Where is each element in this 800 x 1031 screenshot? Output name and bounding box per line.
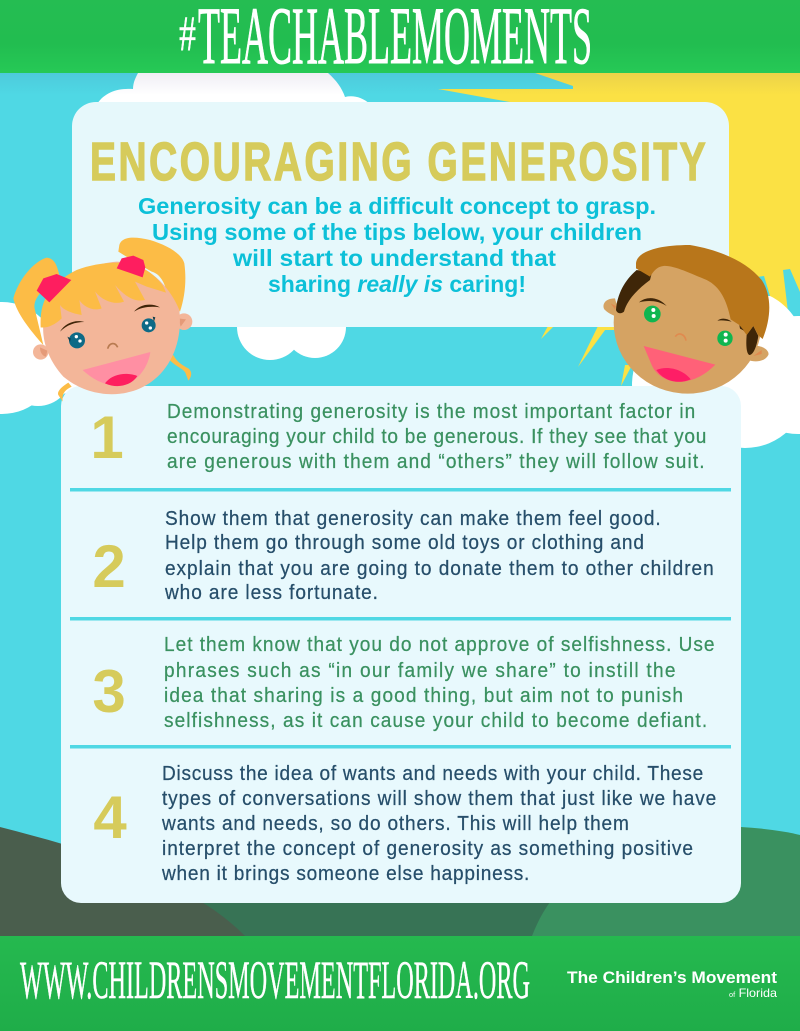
- hashtag title: [179, 0, 592, 81]
- tip 1: Demonstrating generosity is the most important factor in: [167, 400, 695, 423]
- tip 2: who are less fortunate.: [164, 581, 378, 604]
- tip 2: [92, 507, 714, 604]
- top shadow under header: [0, 73, 800, 95]
- logo text: [567, 968, 777, 1000]
- intro panel: [72, 102, 729, 327]
- tip 3: [92, 633, 715, 732]
- tip 2: explain that you are going to donate them to other children: [165, 557, 714, 580]
- tip 4: Discuss the idea of wants and needs with your child. These: [162, 762, 703, 785]
- tip 3: 3: [92, 658, 126, 725]
- tip 4: wants and needs, so do others. This will help them: [161, 812, 629, 835]
- intro text: [138, 193, 656, 297]
- footer bar: [0, 936, 800, 1031]
- tip 4: 4: [93, 784, 127, 851]
- intro text: will start to understand that: [232, 245, 556, 271]
- intro text: sharing really is caring!: [268, 271, 526, 297]
- intro text: Using some of the tips below, your children: [152, 219, 642, 245]
- tip 4: interpret the concept of generosity as something positive: [162, 837, 693, 860]
- tip 2: Help them go through some old toys or clothing and: [165, 531, 644, 554]
- character: girl: [13, 238, 192, 402]
- character: boy: [603, 245, 769, 394]
- header bar: [0, 0, 800, 81]
- tip 2: 2: [92, 533, 126, 600]
- tip 1: 1: [90, 404, 124, 471]
- tip 1: are generous with them and “others” they will follow suit.: [167, 450, 705, 473]
- tip 1: encouraging your child to be generous. If they see that you: [167, 425, 706, 448]
- intro text: Generosity can be a difficult concept to grasp.: [138, 193, 656, 219]
- tip 3: Let them know that you do not approve of selfishness. Use: [164, 633, 715, 656]
- hills: [0, 827, 800, 936]
- cloud: left: [0, 302, 89, 414]
- tip 4: types of conversations will show them that just like we have: [162, 787, 716, 810]
- tip 3: phrases such as “in our family we share” to instill the: [164, 659, 676, 682]
- cloud: right: [632, 296, 800, 453]
- cloud: centre: [237, 294, 346, 360]
- tips panel: [61, 386, 741, 903]
- heading: ENCOURAGING GENEROSITY: [90, 131, 706, 191]
- tip 3: selfishness, as it can cause your child to become defiant.: [164, 709, 707, 732]
- logo text: of Florida: [729, 986, 777, 1000]
- tip 3: idea that sharing is a good thing, but aim not to punish: [164, 684, 683, 707]
- tip 4: when it brings someone else happiness.: [161, 862, 529, 885]
- tip 1: [90, 400, 706, 473]
- cloud: top: [97, 73, 370, 104]
- tip 4: [93, 762, 716, 885]
- tip 2: Show them that generosity can make them feel good.: [165, 507, 661, 530]
- logo text: The Children’s Movement: [567, 968, 777, 987]
- sun with rays: [438, 73, 800, 386]
- hashtag title: #: [179, 5, 196, 61]
